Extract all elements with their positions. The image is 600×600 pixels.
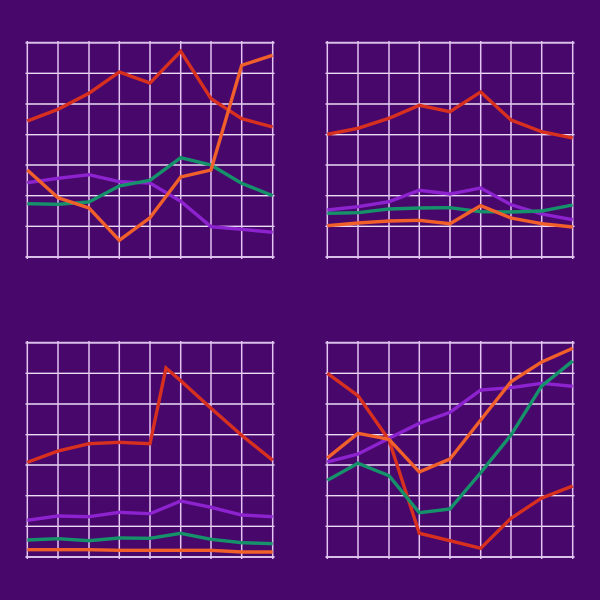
line: orange series (27, 550, 273, 552)
line: green series (327, 205, 573, 213)
line: red series (27, 368, 273, 462)
line: red series (327, 92, 573, 138)
line: purple series (27, 501, 273, 520)
line: purple series (27, 175, 273, 232)
line: green series (27, 158, 273, 204)
line: orange series (327, 206, 573, 227)
panel: top-left line chart (26, 41, 274, 259)
line: red series (27, 51, 273, 127)
line: purple series (327, 188, 573, 220)
panel: top-right line chart (326, 41, 574, 259)
panel: bottom-right line chart (326, 341, 574, 559)
line: green series (27, 533, 273, 544)
panel: bottom-left line chart (26, 341, 274, 559)
line: orange series (27, 55, 273, 240)
line: green series (327, 361, 573, 513)
line: purple series (327, 383, 573, 462)
line: red series (327, 373, 573, 548)
line: orange series (327, 348, 573, 472)
